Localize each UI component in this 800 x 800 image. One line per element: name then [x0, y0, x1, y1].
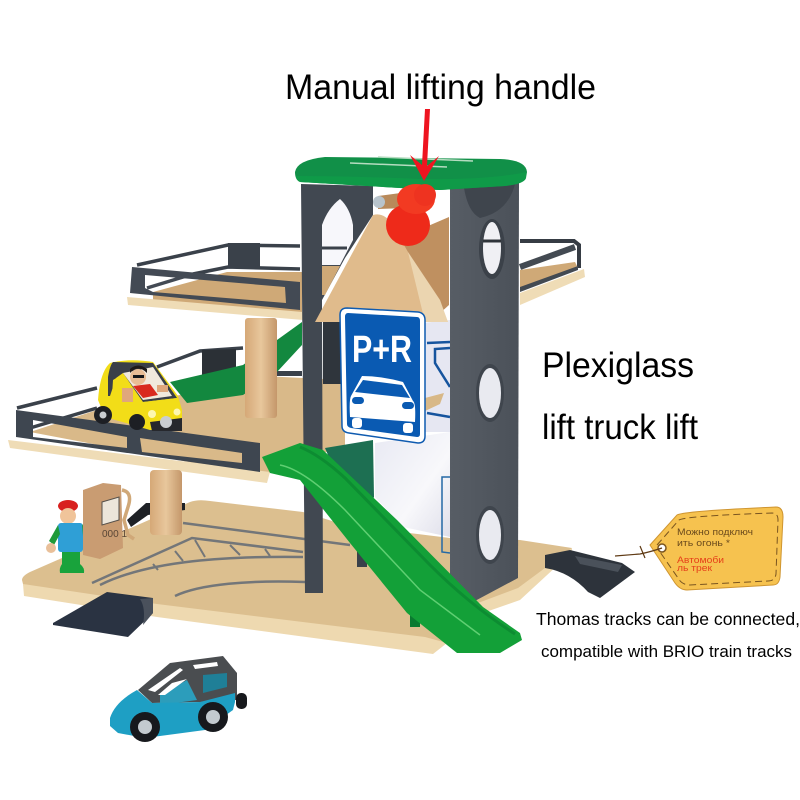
P+R sign: [340, 308, 425, 443]
ramp side strut: [410, 615, 420, 627]
tag text line 2: ить огонь *: [677, 538, 730, 549]
upper deck: [127, 262, 585, 320]
garage interior: [323, 320, 450, 567]
upper post: [245, 318, 277, 418]
P+R sign: P+R: [352, 329, 412, 371]
left track connector: [53, 592, 153, 637]
upper deck back rail: [137, 241, 579, 274]
left tower pillar: [301, 184, 373, 593]
label: lift truck lift: lift truck lift: [542, 408, 698, 447]
green roof: [295, 157, 527, 190]
lower green ramp: [262, 443, 522, 653]
dark track piece behind post: [127, 503, 185, 527]
middle deck back rail: [17, 348, 302, 428]
lower post: [150, 470, 182, 535]
yellow car: [94, 360, 182, 431]
label: plexiglass: Plexiglass: [542, 346, 694, 385]
right tower pillar: [450, 182, 519, 602]
tag red text line 2: ль трек: [677, 563, 713, 574]
figure: attendant: [46, 500, 97, 573]
heading: manual lifting handle: Manual lifting handle: [285, 68, 596, 107]
tag text: Можно подключ: [677, 527, 753, 538]
base board: [22, 500, 572, 654]
caption: Thomas tracks: Thomas tracks can be connected,: [536, 609, 800, 629]
right track connector: [545, 550, 635, 598]
red arrow: [410, 109, 439, 181]
fuel pump: 000 1: [102, 529, 127, 540]
caption: BRIO compatibility: compatible with BRIO train tracks: [541, 642, 792, 661]
green ramp behind upper post: [170, 322, 302, 403]
fuel pump: [83, 483, 134, 559]
blue car: [110, 656, 247, 742]
red lifting handle: [373, 184, 436, 246]
wooden peak: [315, 214, 449, 322]
price tag: [615, 507, 783, 590]
middle deck: [8, 375, 345, 483]
tag red text: Автомоби: [677, 555, 724, 566]
